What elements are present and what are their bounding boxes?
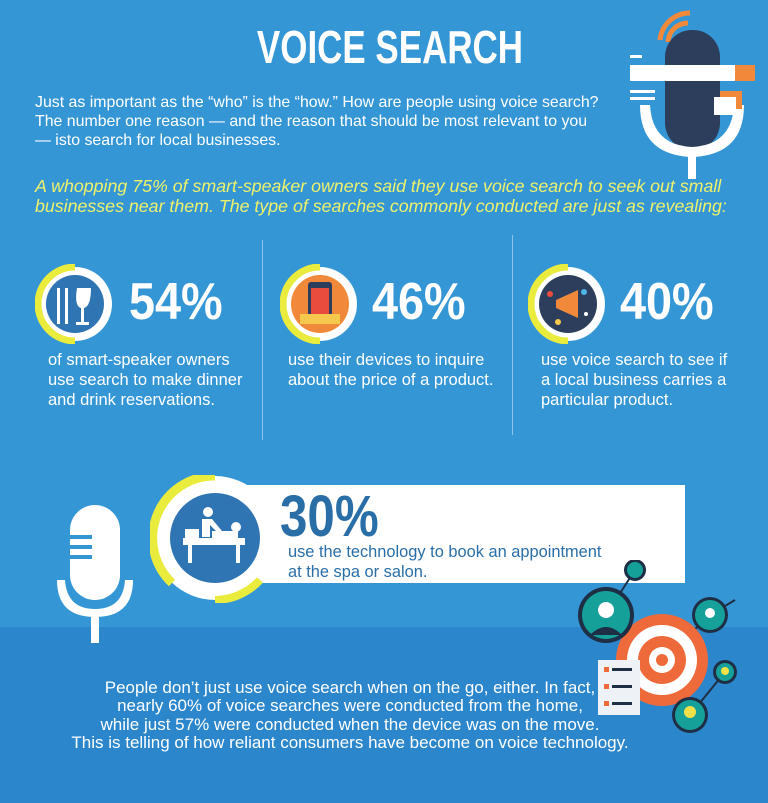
description: and drink reservations.: [48, 391, 215, 409]
description: use search to make dinner: [48, 371, 242, 389]
description: use their devices to inquire: [288, 351, 484, 369]
icon: shopping: [280, 264, 357, 344]
description: [288, 543, 602, 581]
panel: 46%: [280, 264, 493, 389]
closing paragraph: nearly 60% of voice searches were conducted from the home,: [117, 696, 583, 715]
description: [48, 351, 242, 409]
icon: megaphone: [528, 264, 605, 344]
description: [541, 351, 728, 409]
stat number: 40%: [620, 273, 714, 331]
description: use the technology to book an appointment: [288, 543, 601, 561]
panel: 54%: [35, 264, 242, 409]
intro paragraph: Just as important as the “who” is the “how.” How are people using voice search?: [35, 94, 599, 111]
panel: 40%: [528, 264, 728, 409]
closing paragraph: This is telling of how reliant consumers have become on voice technology.: [71, 733, 629, 752]
icon: spa massage: [150, 475, 263, 603]
bottom band: [0, 627, 768, 803]
stat number: 54%: [129, 273, 223, 331]
description: particular product.: [541, 391, 673, 409]
intro paragraph: — isto search for local businesses.: [35, 132, 281, 149]
closing paragraph: People don’t just use voice search when on the go, either. In fact,: [105, 678, 595, 697]
intro paragraph: The number one reason — and the reason that should be most relevant to you: [35, 113, 587, 130]
icon: microphone with search bar: [630, 10, 755, 179]
highlight statement: A whopping 75% of smart-speaker owners said they use voice search to seek out small: [35, 176, 721, 196]
intro paragraph: [35, 94, 599, 149]
stat number: 30%: [280, 484, 379, 549]
description: at the spa or salon.: [288, 563, 427, 581]
closing paragraph: while just 57% were conducted when the device was on the move.: [101, 715, 599, 734]
stat number: 46%: [372, 273, 466, 331]
highlight statement: [34, 176, 727, 216]
icon: white microphone: [57, 505, 133, 643]
highlight statement: businesses near them. The type of searches commonly conducted are just as revealing:: [35, 196, 727, 216]
description: of smart-speaker owners: [48, 351, 230, 369]
description: about the price of a product.: [288, 371, 493, 389]
icon: dining: [35, 264, 112, 344]
title: VOICE SEARCH: [257, 21, 523, 73]
icon: target network: [578, 560, 737, 733]
description: [288, 351, 493, 389]
closing paragraph: [71, 678, 629, 752]
panel: 30% box: [150, 475, 685, 603]
description: a local business carries a: [541, 371, 726, 389]
description: use voice search to see if: [541, 351, 727, 369]
